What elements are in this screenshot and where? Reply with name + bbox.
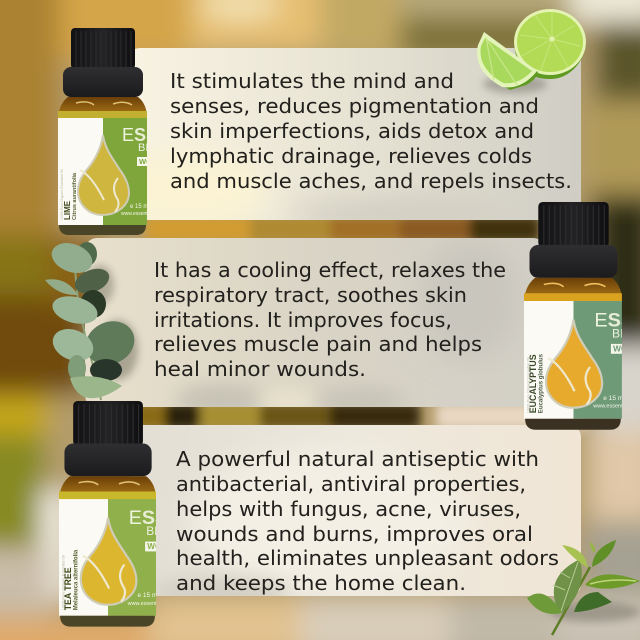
- text: lime benefits: [170, 69, 572, 193]
- text: eucalyptus benefits: heal minor wounds.: [154, 357, 366, 381]
- text: eucalyptus benefits: irritations. It improves focus,: [154, 308, 452, 332]
- panel: tea tree description card: [130, 425, 581, 606]
- bottle: lime essential oil: 100% Pure Organic Essential Oil: [60, 169, 64, 220]
- text: eucalyptus benefits: [154, 258, 506, 381]
- bottle: tea tree essential oil: TEA TREE: [63, 567, 73, 610]
- bottle: tea tree essential oil: SS: [142, 507, 168, 529]
- bottle: eucalyptus essential oil: e 15 ml: [603, 395, 625, 402]
- bottle: tea tree essential oil: Melaleuca alternifolia: [74, 549, 80, 610]
- bottle: tea tree essential oil: [59, 401, 156, 627]
- text: tea tree benefits: wounds and burns, improves oral: [176, 522, 533, 546]
- bottle: lime essential oil: BI: [138, 142, 148, 154]
- text: tea tree benefits: and keeps the home clean.: [176, 571, 466, 595]
- text: tea tree benefits: antibacterial, antiviral properties,: [176, 472, 526, 496]
- bottle: eucalyptus essential oil: E: [594, 309, 608, 331]
- bottle: lime essential oil: SS: [134, 125, 158, 145]
- text: lime benefits: It stimulates the mind and: [170, 69, 454, 93]
- bottle: tea tree essential oil: 100% Pure Organic Essential Oil: [61, 555, 65, 610]
- bottle: eucalyptus essential oil: WO: [613, 345, 628, 354]
- text: tea tree benefits: A powerful natural antiseptic with: [176, 447, 539, 471]
- bottle: eucalyptus essential oil: [524, 202, 622, 430]
- icon: lime fruit: [477, 9, 586, 93]
- text: lime benefits: lymphatic drainage, relieves colds: [170, 144, 532, 168]
- text: lime benefits: skin imperfections, aids detox and: [170, 119, 534, 143]
- icon: tea leaves: [527, 540, 640, 635]
- bottle: eucalyptus essential oil: 100% Pure Organic Essential Oil: [527, 357, 531, 413]
- bottle: eucalyptus essential oil: Eucalyptus globulus: [539, 353, 545, 413]
- text: tea tree benefits: helps with fungus, acne, viruses,: [176, 497, 521, 521]
- bottle: eucalyptus essential oil: EUCALYPTUS: [528, 354, 538, 413]
- bottle: lime essential oil: Citrus aurantifolia: [72, 172, 78, 220]
- bottle: eucalyptus essential oil: BI: [612, 326, 623, 340]
- bottle: lime essential oil: www.essential: [121, 211, 153, 217]
- text: eucalyptus benefits: relieves muscle pain and helps: [154, 332, 482, 356]
- bottle: tea tree essential oil: www.essential: [127, 601, 162, 607]
- text: lime benefits: senses, reduces pigmentation and: [170, 94, 539, 118]
- bottle: tea tree essential oil: WO: [147, 542, 161, 551]
- panel: lime description card: [134, 48, 581, 220]
- text: lime benefits: and muscle aches, and repels insects.: [170, 169, 572, 193]
- bottle: eucalyptus essential oil: SS: [608, 309, 634, 331]
- icon: eucalyptus sprig: [45, 238, 142, 400]
- bottle: lime essential oil: e 15 ml: [130, 204, 150, 210]
- bottle: lime essential oil: E: [122, 125, 134, 145]
- panel: eucalyptus description card: [85, 238, 545, 416]
- bottle: lime essential oil: WO: [139, 157, 152, 166]
- text: eucalyptus benefits: respiratory tract, soothes skin: [154, 283, 467, 307]
- text: tea tree benefits: health, eliminates unpleasant odors: [176, 546, 559, 570]
- bottle: lime essential oil: [58, 28, 147, 235]
- bottle: lime essential oil: LIME: [63, 200, 72, 220]
- bottle: tea tree essential oil: BI: [146, 524, 158, 538]
- text: tea tree benefits: [176, 447, 559, 595]
- text: eucalyptus benefits: It has a cooling effect, relaxes the: [154, 258, 506, 282]
- bottle: eucalyptus essential oil: www.essential: [592, 404, 628, 410]
- bottle: tea tree essential oil: e 15 ml: [137, 592, 159, 599]
- bottle: tea tree essential oil: E: [129, 507, 142, 529]
